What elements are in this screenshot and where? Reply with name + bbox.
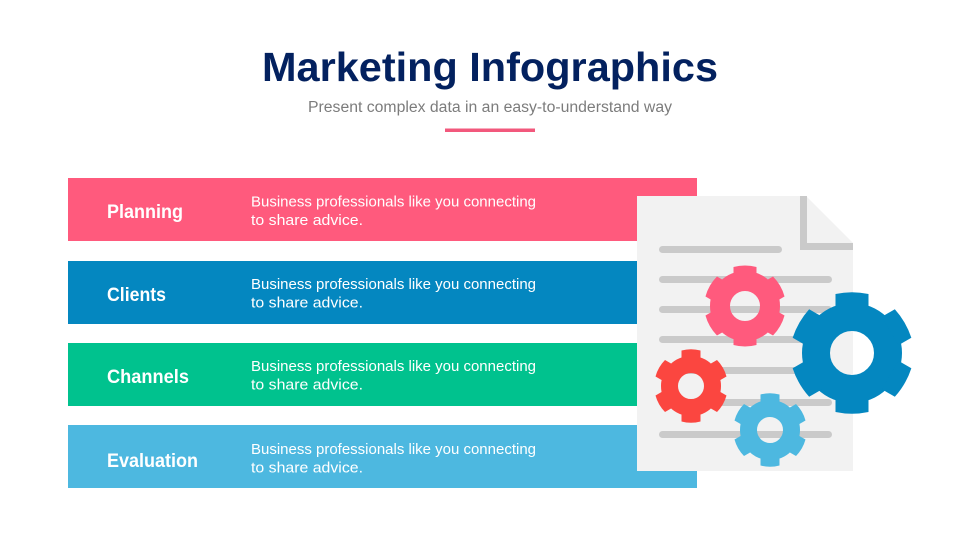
panel: channels [68, 343, 697, 406]
text: planning description: Business professionals like you connecting [251, 194, 536, 210]
label: planning: Planning [107, 202, 183, 223]
text: evaluation description: Business professionals like you connecting [251, 441, 536, 458]
text: channels description: to share advice. [251, 376, 363, 394]
icon: red gear [654, 349, 728, 423]
icon: blue gear [791, 292, 913, 414]
text: channels description: Business professionals like you connecting [251, 358, 536, 375]
accent underline [445, 128, 535, 132]
subtitle: Present complex data in an easy-to-understand way [308, 99, 672, 116]
panel: evaluation [68, 425, 697, 488]
text: planning description: to share advice. [251, 212, 363, 229]
label: clients: Clients [107, 285, 166, 306]
text: clients description: Business professionals like you connecting [251, 276, 536, 293]
panel: planning [68, 178, 697, 241]
label: channels: Channels [107, 367, 189, 388]
icon: document [637, 196, 853, 471]
text: clients description: to share advice. [251, 294, 363, 312]
text: evaluation description: to share advice. [251, 460, 363, 476]
icon: pink gear [704, 266, 786, 346]
panel: clients [68, 261, 697, 324]
title: Marketing Infographics [262, 44, 718, 90]
icon: light blue gear [733, 393, 807, 467]
label: evaluation: Evaluation [107, 451, 198, 472]
